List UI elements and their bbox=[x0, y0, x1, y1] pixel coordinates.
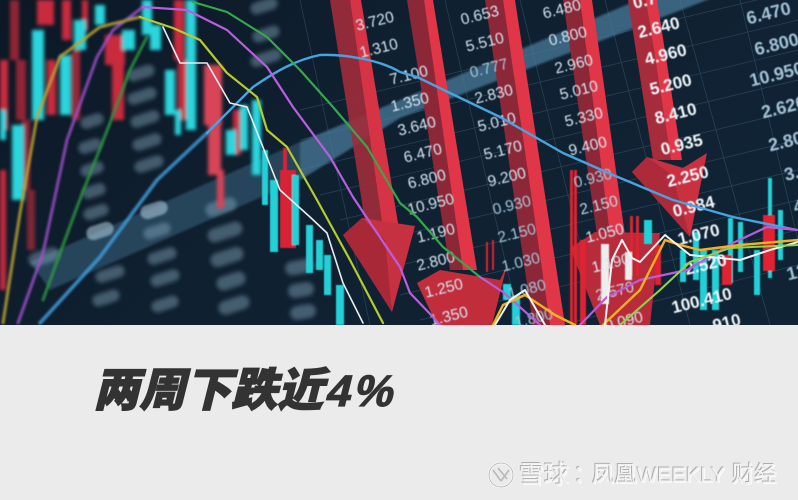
number column 3: 2.960 bbox=[553, 52, 595, 78]
moving average lines bbox=[3, 2, 798, 325]
number column 1: 1.250 bbox=[423, 276, 465, 302]
number column 3: 2.150 bbox=[578, 193, 620, 219]
number column 2: 0.653 bbox=[459, 3, 501, 29]
number column 3: 5.330 bbox=[563, 105, 605, 131]
blurred left number pills bbox=[27, 0, 317, 321]
number column 4: 5.200 bbox=[648, 70, 694, 99]
highlighted diagonal band bbox=[30, 0, 720, 290]
number column 1: 10.950 bbox=[406, 191, 456, 219]
number column 5 bbox=[744, 0, 798, 284]
highlighted pills bbox=[85, 199, 169, 242]
number column 3 bbox=[541, 0, 645, 335]
background photo: falling stock market chart bbox=[0, 0, 798, 325]
title: 两周下跌近4% bbox=[90, 354, 405, 420]
number column 4: 0.984 bbox=[671, 192, 717, 221]
number column 4: 1.070 bbox=[676, 220, 722, 249]
number column 3: 9.400 bbox=[567, 134, 609, 160]
number column 4: 0.935 bbox=[659, 130, 705, 159]
number column 4: 100.410 bbox=[670, 284, 734, 317]
watermark: ： bbox=[573, 461, 597, 488]
number column 1: 1.190 bbox=[415, 221, 457, 247]
purple line bbox=[143, 7, 440, 325]
arrow 2 bbox=[407, 0, 507, 325]
number column 3: 5.010 bbox=[558, 78, 600, 104]
icon: xueqiu logo bbox=[488, 462, 514, 488]
watermark bbox=[488, 460, 777, 489]
red down arrows bbox=[330, 0, 707, 325]
watermark: 凤凰 bbox=[592, 462, 637, 487]
number column 3: 2.570 bbox=[594, 279, 636, 305]
number column 2 bbox=[459, 3, 555, 332]
yellow-green line bbox=[140, 17, 383, 323]
number column 3: 0.930 bbox=[572, 166, 614, 192]
number column 3: 0.800 bbox=[547, 24, 589, 50]
number column 2: 0.777 bbox=[468, 56, 510, 82]
number column 2: 5.170 bbox=[482, 138, 524, 164]
lower right lines bbox=[480, 227, 797, 325]
blurred left candlesticks bbox=[0, 0, 261, 290]
arrow 1 bbox=[330, 0, 415, 312]
arrow 5 bbox=[628, 0, 707, 237]
blurred left line segments bbox=[3, 7, 207, 323]
number column 1: 1.310 bbox=[358, 36, 400, 62]
number column 1 bbox=[354, 9, 470, 330]
watermark: WEEKLY bbox=[637, 463, 725, 487]
number column 1: 2.800 bbox=[415, 249, 457, 275]
number column 3: 1.190 bbox=[590, 251, 632, 277]
number column 4 bbox=[631, 0, 743, 335]
table numbers bbox=[354, 0, 798, 335]
number column 2: 5.010 bbox=[476, 110, 518, 136]
green line bbox=[193, 2, 480, 277]
number column 2: 1.030 bbox=[500, 250, 542, 276]
number column 4: 2.250 bbox=[665, 162, 711, 191]
number column 2: 9.200 bbox=[486, 165, 528, 191]
blue line bbox=[207, 55, 797, 230]
number column 1: 1.350 bbox=[389, 90, 431, 116]
watermark: 财经 bbox=[732, 462, 777, 487]
arrow 4 bbox=[563, 0, 660, 325]
number column 2: 5.510 bbox=[464, 30, 506, 56]
watermark: 雪球 bbox=[519, 461, 569, 489]
white line bbox=[163, 27, 363, 323]
number column 4: 8.410 bbox=[653, 99, 699, 128]
number column 1: 6.800 bbox=[406, 167, 448, 193]
number column 4: 2.640 bbox=[636, 13, 682, 42]
sharp candlesticks bbox=[262, 148, 783, 325]
number column 1: 3.640 bbox=[396, 114, 438, 140]
number column 2: 0.930 bbox=[491, 193, 533, 219]
number column 2: 2.150 bbox=[496, 221, 538, 247]
number column 4: 4.960 bbox=[643, 40, 689, 69]
number column 1: 6.470 bbox=[402, 141, 444, 167]
number column 2: 2.830 bbox=[473, 82, 515, 108]
number column 1: 3.720 bbox=[354, 9, 396, 35]
arrow 3 bbox=[485, 0, 565, 325]
number column 3: 1.050 bbox=[584, 221, 626, 247]
number column 2: 1.080 bbox=[506, 277, 548, 303]
number column 4: 2.520 bbox=[683, 250, 729, 279]
number column 1: 7.100 bbox=[388, 63, 430, 89]
